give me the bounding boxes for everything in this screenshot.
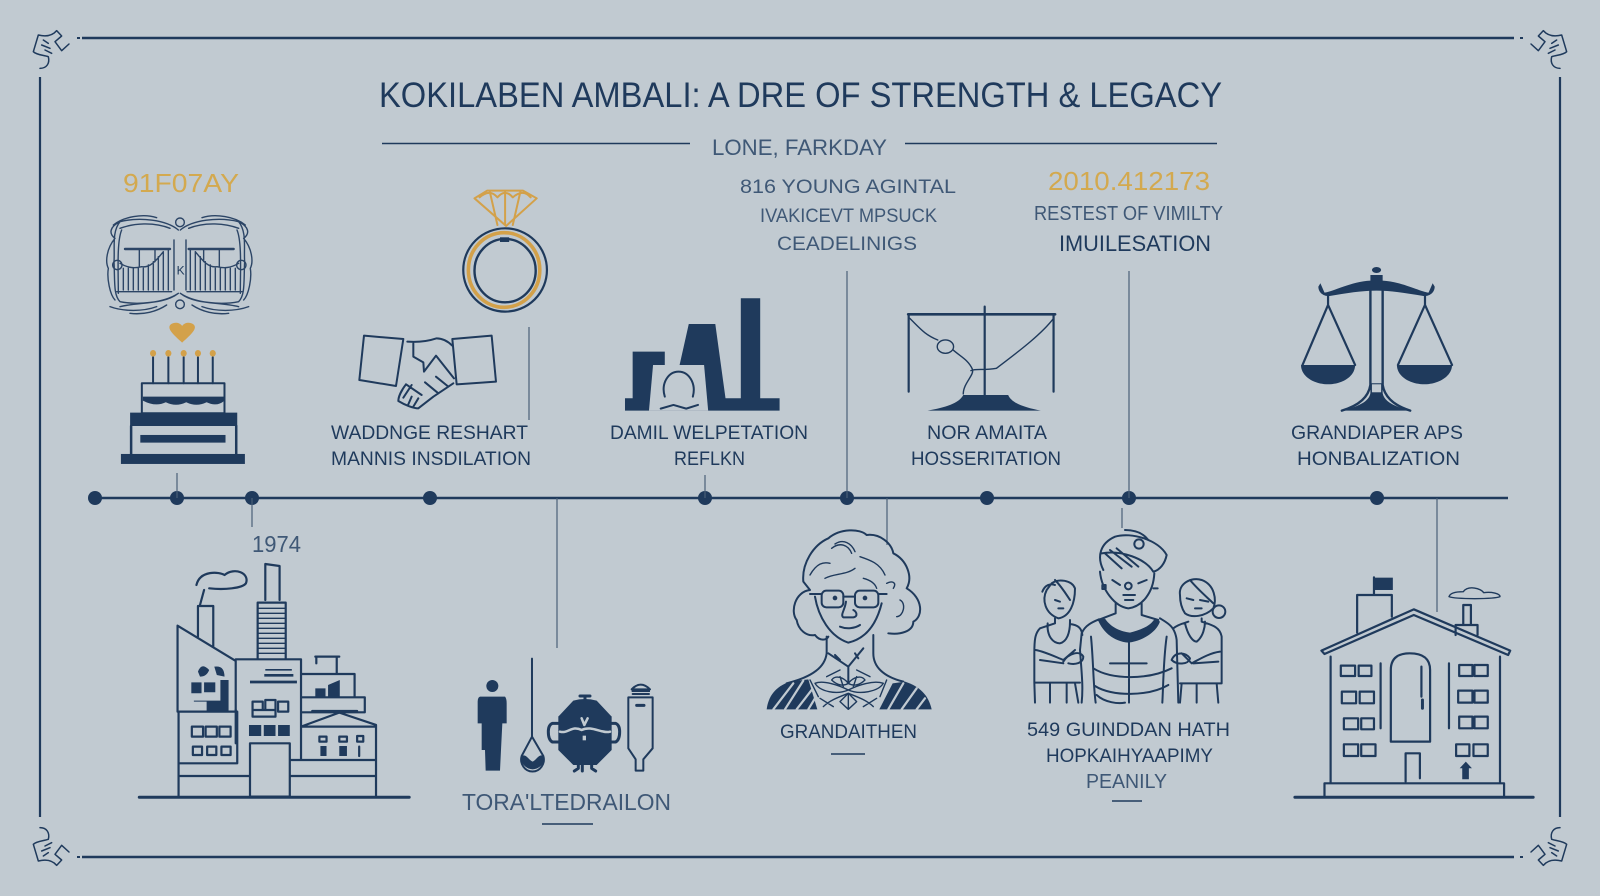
- icon: corner ornament top left: [33, 31, 69, 68]
- label: family: [610, 422, 808, 470]
- label: wedding: [331, 422, 531, 470]
- label: honours: [1291, 422, 1463, 470]
- icon: birthday cake: [121, 350, 245, 464]
- icon: corner ornament bottom right: [1531, 828, 1567, 865]
- icon: scales of justice: [1301, 267, 1452, 411]
- icon: house: [1295, 577, 1533, 797]
- text block: gold date note: IMUILESATION: [1059, 231, 1211, 256]
- icon: person, droplet, vessel and tube: [478, 659, 653, 772]
- accent dash: [831, 753, 865, 755]
- icon: corner ornament bottom left: [33, 828, 69, 865]
- label: family: REFLKN: [674, 448, 745, 470]
- accent dash: [542, 823, 593, 825]
- icon: ornamental frame: K: [177, 263, 185, 277]
- icon: filled factory portrait: [625, 298, 780, 411]
- icon: diamond ring: [463, 191, 547, 312]
- icon: family group: [1034, 530, 1225, 703]
- icon: industrial complex: [139, 564, 409, 797]
- timeline connector lines: [177, 271, 1437, 648]
- accent dash: [1112, 800, 1142, 802]
- text block: centre note: IVAKICEVT MPSUCK: [760, 206, 937, 227]
- icon: corner ornament top right: [1531, 31, 1567, 68]
- subtitle with rules: LONE, FARKDAY: [712, 135, 887, 160]
- text block: centre note: CEADELINIGS: [777, 234, 917, 255]
- label: grandmother: GRANDAITHEN: [780, 722, 917, 743]
- label: family caption: [1027, 720, 1230, 793]
- text block: gold date note: RESTEST OF VIMILTY: [1034, 203, 1223, 225]
- timeline: [88, 491, 1508, 505]
- label: honours: HONBALIZATION: [1297, 448, 1460, 470]
- group: first quadrant icons: [121, 191, 780, 464]
- label: hospital: HOSSERITATION: [911, 448, 1061, 470]
- label: hospital: NOR AMAITA: [927, 422, 1047, 444]
- label: family caption: 549 GUINDDAN HATH: [1027, 720, 1230, 741]
- text block: centre note: [740, 177, 956, 255]
- label: tradition: TORA'LTEDRAILON: [462, 789, 671, 815]
- icon: ornamental frame: [107, 216, 252, 314]
- icon: grandmother portrait: [767, 530, 932, 709]
- text block: gold date note: 2010.412173: [1048, 166, 1210, 196]
- icon: balance frame: [908, 307, 1055, 411]
- label: honours: GRANDIAPER APS: [1291, 422, 1463, 444]
- text block: gold date note: [1034, 166, 1223, 256]
- label: wedding: WADDNGE RESHART: [331, 422, 528, 444]
- text: 1974: 1974: [252, 531, 301, 557]
- text block: birth date: 91F07AY: [123, 168, 239, 198]
- text block: centre note: 816 YOUNG AGINTAL: [740, 177, 956, 198]
- label: hospital: [911, 422, 1061, 470]
- icon: heart: [169, 323, 195, 343]
- label: wedding: MANNIS INSDILATION: [331, 448, 531, 470]
- label: family: DAMIL WELPETATION: [610, 422, 808, 444]
- label: family caption: PEANILY: [1086, 771, 1167, 793]
- title: KOKILABEN AMBALI: A DRE OF STRENGTH & LEGACY: [379, 76, 1222, 115]
- group: second quadrant icons: [908, 267, 1452, 411]
- icon: handshake: [359, 336, 496, 408]
- label: family caption: HOPKAIHYAAPIMY: [1046, 746, 1213, 767]
